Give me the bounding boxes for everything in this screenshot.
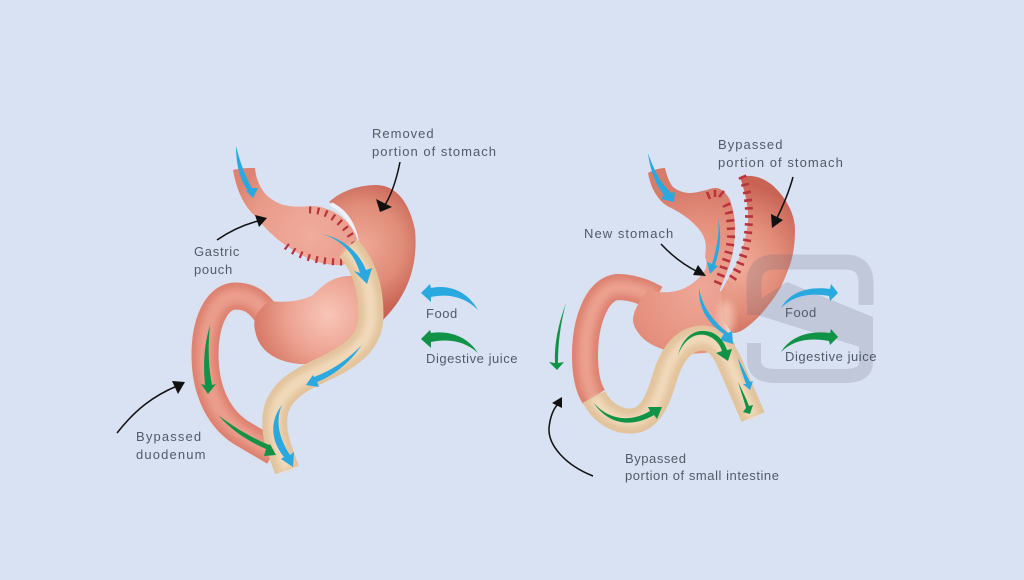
label: gastric pouch: Gastric <box>194 244 240 259</box>
label: removed portion of stomach: portion of stomach <box>372 144 497 159</box>
icon: food arrow right <box>781 284 838 308</box>
small intestine limb <box>275 248 371 470</box>
stitches on pouch <box>286 210 358 262</box>
icon: food arrow left <box>421 284 478 310</box>
label: bypassed portion of small intestine: portion of small intestine <box>625 468 779 483</box>
duodenum tube <box>205 296 274 452</box>
digestive juice label: Digestive juice <box>426 351 518 366</box>
small intestine: biliopancreatic and common limb <box>594 338 753 421</box>
arrow: to new stomach <box>661 244 706 276</box>
digestive juice label: Digestive juice <box>785 349 877 364</box>
green flow arrows <box>549 303 753 423</box>
label: bypassed portion of stomach: Bypassed <box>718 137 784 152</box>
label: bypassed portion of stomach: portion of stomach <box>718 155 844 170</box>
food label: Food <box>785 305 817 320</box>
arrow: to gastric pouch <box>217 215 267 240</box>
cut gap between pouch and removed portion <box>331 204 358 250</box>
arrow: to bypassed duodenum <box>117 381 185 433</box>
icon: digestive juice arrow right <box>781 329 838 352</box>
label: bypassed duodenum: duodenum <box>136 447 207 462</box>
esophagus and gastric pouch <box>233 168 359 265</box>
green flow arrows <box>201 325 276 456</box>
watermark logo <box>747 262 873 376</box>
left diagram: gastric bypass anatomy <box>117 146 416 470</box>
legend: right key <box>781 284 877 364</box>
arrow: to removed portion <box>376 162 400 212</box>
small stitches at top of new stomach <box>707 190 724 199</box>
arrow: to bypassed small intestine <box>549 397 593 476</box>
highlight fold on stomach <box>718 300 734 336</box>
stitches on new stomach <box>716 176 749 287</box>
lower stomach body <box>254 276 366 364</box>
label: removed portion of stomach: Removed <box>372 126 435 141</box>
icon: digestive juice arrow left <box>421 330 478 353</box>
duodenum loop <box>585 287 656 397</box>
removed portion of stomach <box>329 185 416 320</box>
label: new stomach: New stomach <box>584 226 674 241</box>
blue flow arrows <box>236 146 372 467</box>
new stomach <box>633 168 735 354</box>
arrow: to bypassed stomach <box>771 177 793 228</box>
food label: Food <box>426 306 458 321</box>
label: gastric pouch: pouch <box>194 262 233 277</box>
blue flow arrows <box>648 153 753 390</box>
bypassed portion of stomach <box>717 176 795 333</box>
legend: left key <box>421 284 518 366</box>
right diagram: sleeve and bypass anatomy <box>549 153 795 476</box>
label: bypassed duodenum: Bypassed <box>136 429 202 444</box>
label: bypassed portion of small intestine: Bypassed <box>625 451 686 466</box>
